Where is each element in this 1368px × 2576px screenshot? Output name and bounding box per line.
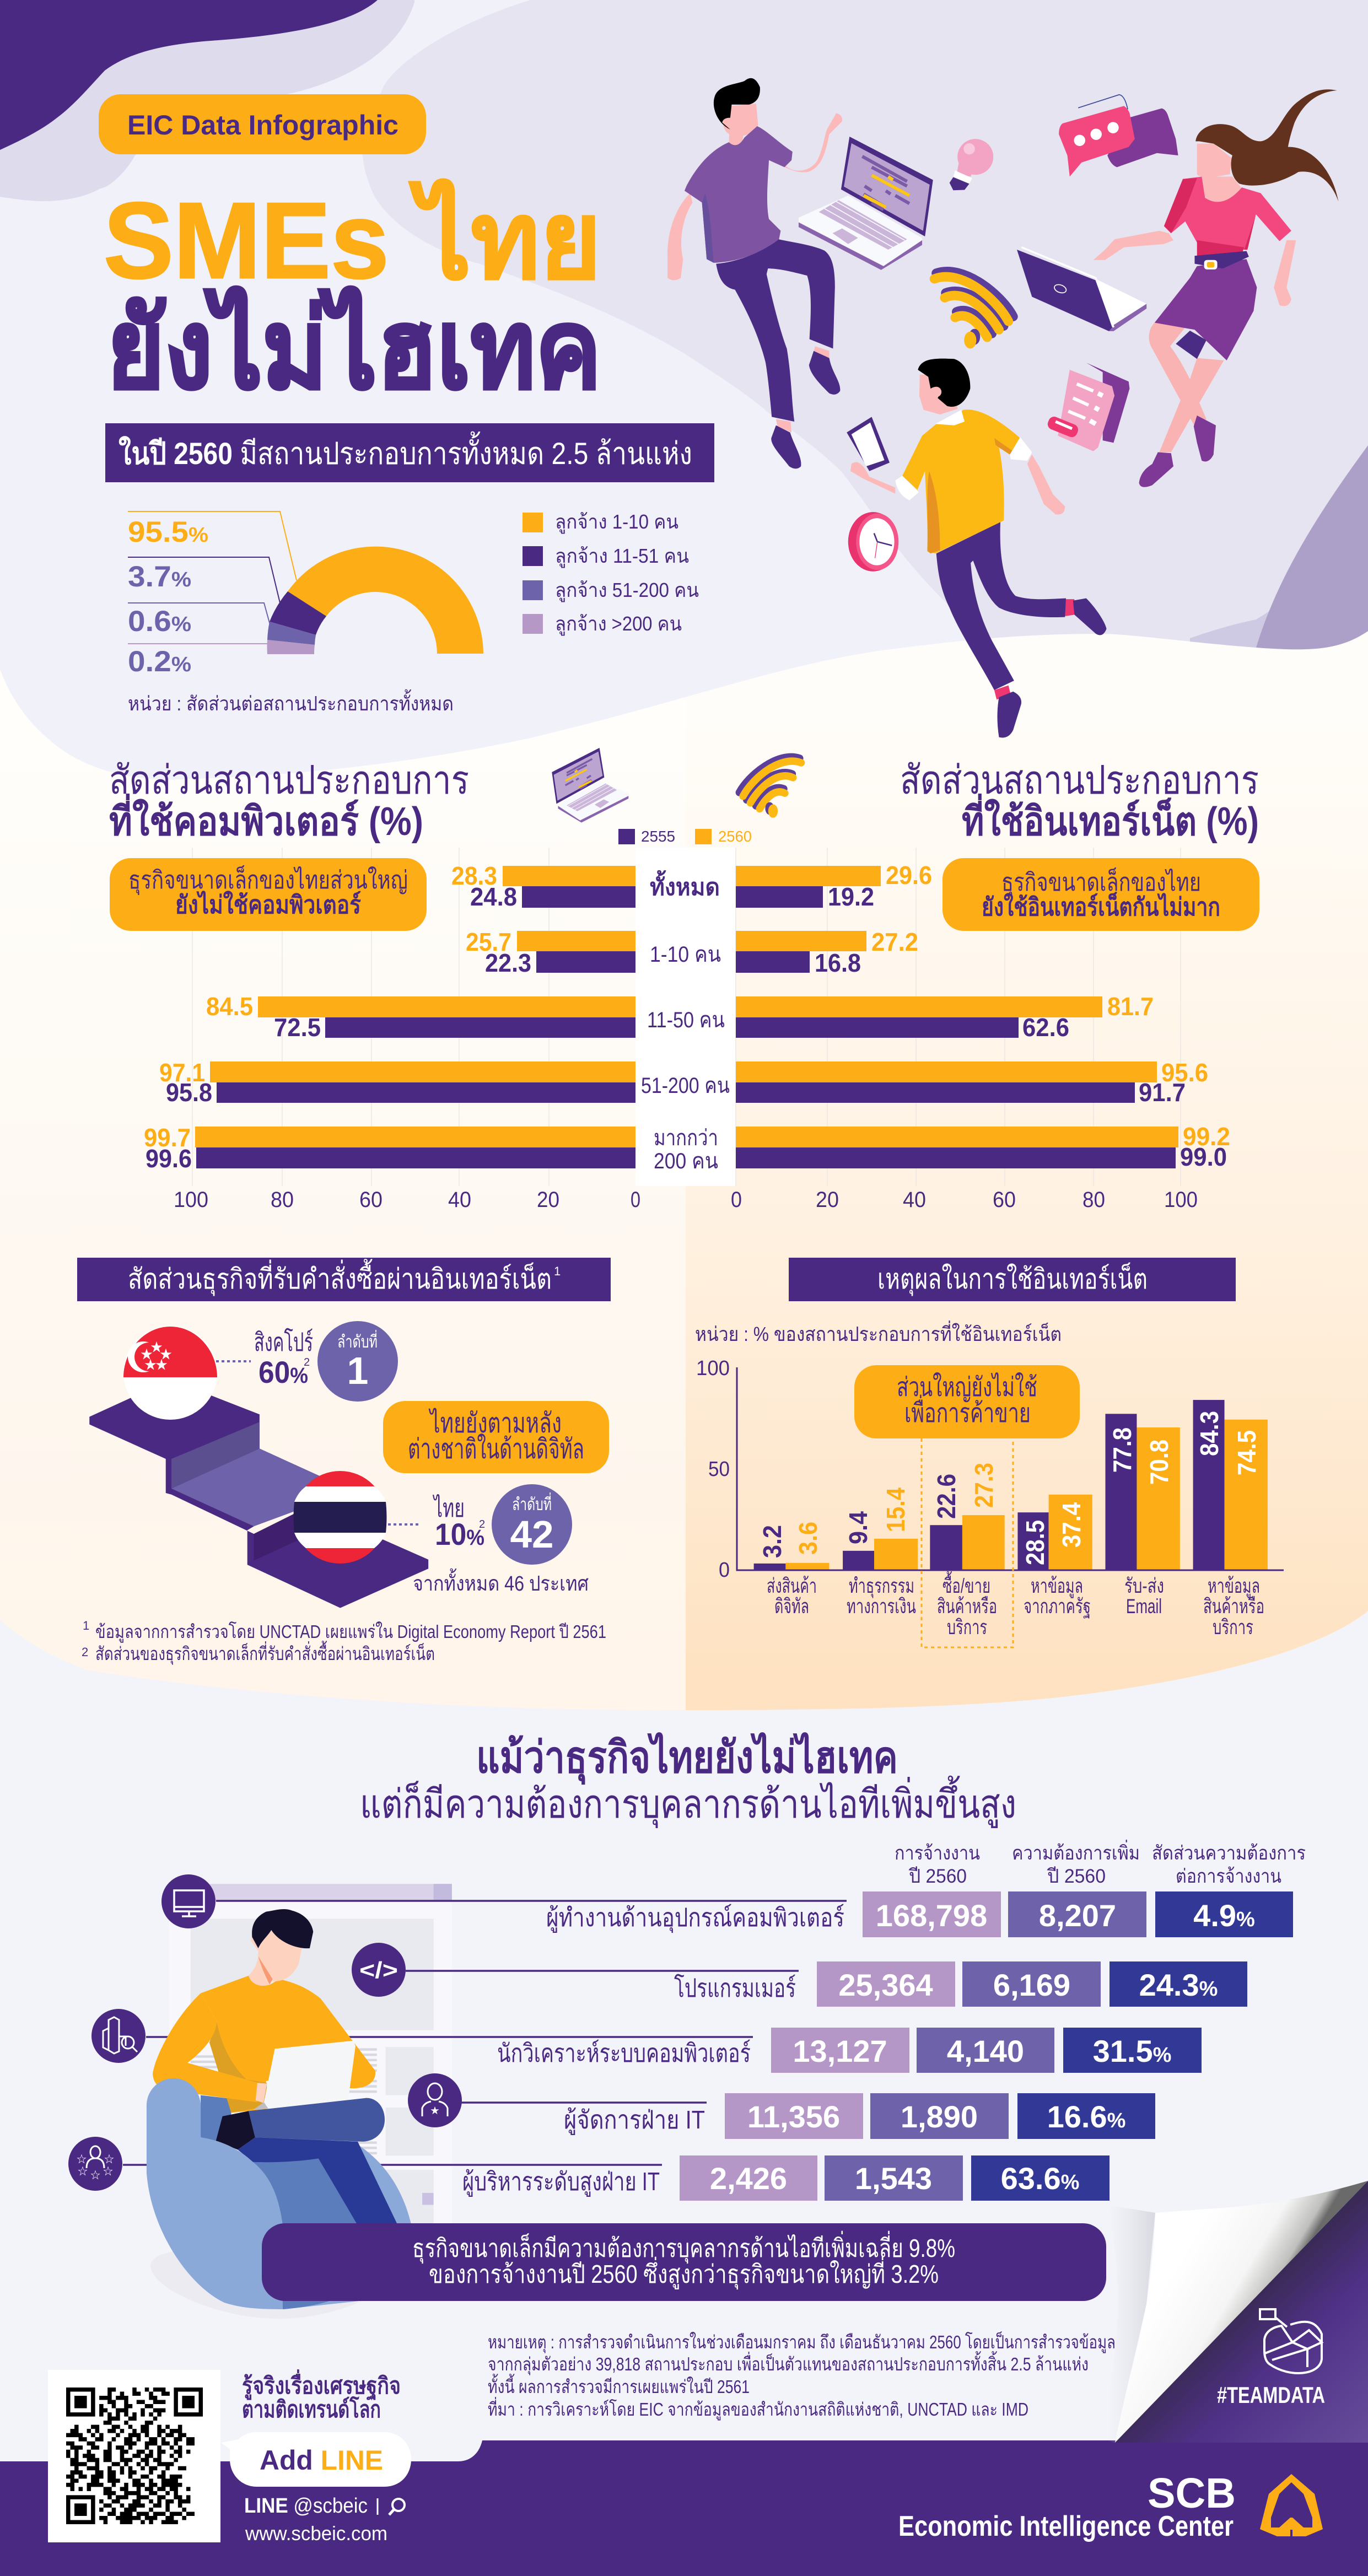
leader: Thailand <box>388 1523 421 1526</box>
contact: LINE id: LINE @scbeic <box>244 2494 368 2518</box>
flag: Singapore: ★ <box>144 1358 157 1372</box>
footnotes: สัดส่วนของธุรกิจขนาดเล็กที่รับคำสั่งซื้อผ่านอินเทอร์เน็ต <box>95 1641 435 1665</box>
donut leader lines <box>128 511 297 644</box>
row: IT executives: 63.6% <box>1001 2161 1079 2196</box>
armchair seat <box>201 2095 380 2309</box>
heading: computer use: ที่ใช้คอมพิวเตอร์ (%) <box>109 793 423 844</box>
row: IT managers: 16.6% <box>1047 2099 1125 2134</box>
category labels: firm size: 51-200 คน <box>641 1074 730 1098</box>
sweater torso and right arm <box>201 1976 375 2112</box>
label: Thailand 10%: 10% <box>435 1517 484 1551</box>
row: IT executives: ผู้บริหารระดับสูงฝ่าย IT <box>462 2167 660 2197</box>
donut legend: ลูกจ้าง 11-51 คน <box>555 545 689 568</box>
donut legend: ลูกจ้าง 51-200 คน <box>555 579 699 602</box>
contact: website: www.scbeic.com <box>245 2522 387 2545</box>
category labels: firm size: 200 คน <box>654 1149 718 1173</box>
bar chart: reasons for internet use: 22.6 <box>932 1474 961 1519</box>
icon: IT manager: ★ <box>430 2106 439 2116</box>
chart: internet use by firm size: 62.6 <box>1022 1013 1069 1042</box>
chart: internet use by firm size: 16.8 <box>815 949 861 977</box>
top corner light blob <box>0 0 414 201</box>
bar chart: reasons for internet use: 37.4 <box>1057 1502 1086 1548</box>
bar chart: reasons for internet use: 50 <box>708 1458 730 1481</box>
row: IT executives <box>462 2155 1110 2201</box>
rank badge: 1: ลำดับที่ <box>337 1330 378 1351</box>
icon: IT executive: ☆ <box>90 2170 100 2181</box>
rank badge: 42: ลำดับที่ <box>512 1492 552 1514</box>
callout: computer use: ธุรกิจขนาดเล็กของไทยส่วนใหญ่ <box>128 865 408 895</box>
callout: demand summary <box>262 2223 1106 2301</box>
icon: IT executive: ☆ <box>78 2166 88 2177</box>
bar chart: reasons for internet use: 9.4 <box>844 1511 872 1544</box>
hero illustration <box>667 78 1338 737</box>
row: programmers: 24.3% <box>1139 1968 1218 2002</box>
open laptop <box>799 137 933 270</box>
heading: internet use: ที่ใช้อินเทอร์เน็ต (%) <box>962 793 1259 844</box>
label: Thailand 10%: 2 <box>479 1518 485 1530</box>
notes and sources: จากกลุ่มตัวอย่าง 39,818 สถานประกอบ เพื่อเป็นตัวแทนของสถานประกอบการทั้งสิ้น 2.5 ล้านแห่ง <box>488 2351 1089 2375</box>
panel header: online orders: 1 <box>554 1264 561 1278</box>
hero background blobs <box>362 0 1368 696</box>
running woman <box>1094 89 1338 487</box>
callout: Thailand lags: ไทยยังตามหลัง <box>428 1408 562 1438</box>
light bulb <box>950 139 993 190</box>
chart: computer use by firm size: 80 <box>271 1188 294 1212</box>
row: computer technicians <box>546 1891 1293 1937</box>
rank badge: 1 <box>317 1321 398 1402</box>
brand: SCB Economic Intelligence Center <box>898 2470 1236 2542</box>
notebook <box>1046 363 1129 451</box>
column headers: IT table: ปี 2560 <box>1047 1866 1106 1887</box>
footnotes: ข้อมูลจากการสำรวจโดย UNCTAD เผยแพร่ใน Digital Economy Report ปี 2561 <box>95 1621 606 1643</box>
label: Singapore 60%: สิงคโปร์ <box>254 1328 313 1356</box>
bar chart: reasons for internet use: ดิจิทัล <box>774 1595 809 1618</box>
head <box>249 1920 305 1986</box>
chart: internet use by firm size: 20 <box>816 1188 839 1212</box>
donut value labels: 95.5% <box>128 516 208 548</box>
row: system analysts: 31.5% <box>1093 2034 1171 2068</box>
row: IT managers: 1,890 <box>901 2099 978 2134</box>
notes and sources: ที่มา : การวิเคราะห์โดย EIC จากข้อมูลของสำนักงานสถิติแห่งชาติ, UNCTAD และ IMD <box>488 2397 1028 2421</box>
label: Singapore 60%: 2 <box>304 1356 310 1368</box>
label: Thailand 10% <box>432 1494 485 1551</box>
flag: Singapore: ★ <box>160 1348 172 1361</box>
chart: computer use by firm size: 60 <box>359 1188 383 1212</box>
badge: EIC Data Infographic: EIC Data Infographic <box>127 110 398 141</box>
callout: internet use: ยังใช้อินเทอร์เน็ตกันไม่มาก <box>982 892 1220 921</box>
icon: mini laptop <box>552 748 628 822</box>
chart: internet use by firm size: 40 <box>903 1188 926 1212</box>
sweater shade <box>209 2022 267 2112</box>
logo: SCB bodhi leaf <box>1260 2474 1323 2536</box>
row: system analysts: นักวิเคราะห์ระบบคอมพิวเตอร์ <box>497 2039 751 2067</box>
panel header: internet use reasons <box>789 1258 1236 1301</box>
chart: computer use by firm size: 24.8 <box>470 882 517 911</box>
flag: Singapore: ★ <box>155 1358 168 1372</box>
donut legend <box>523 510 699 636</box>
callout: not for commerce: ส่วนใหญ่ยังไม่ใช้ <box>897 1372 1037 1402</box>
QR code <box>48 2370 220 2542</box>
icon: IT executive: ☆ <box>77 2154 87 2165</box>
row: system analysts: 4,140 <box>947 2034 1024 2068</box>
heading: computer use <box>109 758 469 844</box>
row: system analysts: 13,127 <box>793 2034 887 2068</box>
rank badge: 42: 42 <box>510 1513 553 1556</box>
wifi symbol <box>934 272 1013 348</box>
icon: programmer <box>352 1943 406 1997</box>
label: Singapore 60%: 60% <box>258 1355 308 1389</box>
bar chart: reasons for internet use: 84.3 <box>1195 1411 1224 1456</box>
brand: SCB Economic Intelligence Center: SCB <box>1148 2470 1236 2517</box>
chart: internet use by firm size: 95.6 <box>1161 1058 1208 1087</box>
flag: Singapore: ★ <box>141 1348 153 1361</box>
callout: computer use <box>110 858 427 931</box>
bar chart: reasons for internet use: ส่งสินค้า <box>767 1575 817 1597</box>
section heading: IT workforce: แต่ก็มีความต้องการบุคลากรด้านไอทีเพิ่มขึ้นสูง <box>360 1775 1016 1828</box>
icon: computer technician <box>161 1874 216 1928</box>
bubble: Add LINE: Add LINE <box>260 2445 383 2476</box>
callout: Thailand lags: ต่างชาติในด้านดิจิทัล <box>408 1433 584 1464</box>
bar chart: reasons for internet use: บริการ <box>947 1616 987 1639</box>
bar chart: reasons for internet use: 0 <box>719 1559 730 1582</box>
connector lines <box>123 1901 847 2165</box>
chart: internet use by firm size: 29.6 <box>886 861 932 890</box>
chart: computer use by firm size: 28.3 <box>451 861 497 890</box>
chart: internet use by firm size: 100 <box>1164 1188 1198 1212</box>
section heading: IT workforce <box>360 1732 1016 1828</box>
row: IT managers: 11,356 <box>747 2099 840 2134</box>
row: IT managers: ผู้จัดการฝ่าย IT <box>564 2105 705 2135</box>
unit note: reasons: หน่วย : % ของสถานประกอบการที่ใช้อินเทอร์เน็ต <box>695 1321 1062 1345</box>
icon: IT executive <box>68 2137 122 2191</box>
wall clock <box>848 512 898 572</box>
panel header: online orders: สัดส่วนธุรกิจที่รับคำสั่งซื้อผ่านอินเทอร์เน็ต <box>128 1259 552 1296</box>
donut value labels <box>128 516 208 678</box>
callout: demand summary: ของการจ้างงานปี 2560 ซึ่งสูงกว่าธุรกิจขนาดใหญ่ที่ 3.2% <box>429 2256 939 2290</box>
label: Thailand 10%: ไทย <box>432 1494 465 1522</box>
badge: EIC Data Infographic <box>99 94 426 154</box>
chart: internet use by firm size: 99.2 <box>1183 1122 1230 1151</box>
footnotes <box>82 1619 606 1665</box>
man with purple shirt <box>667 78 842 468</box>
panel header: internet use reasons: เหตุผลในการใช้อินเทอร์เน็ต <box>877 1263 1148 1296</box>
dotted highlight box <box>922 1438 1013 1647</box>
page curl <box>1097 2181 1368 2443</box>
icon: team data <box>1260 2309 1322 2373</box>
column headers: IT table: ปี 2560 <box>908 1866 967 1887</box>
bar chart: reasons for internet use: 27.3 <box>970 1463 998 1508</box>
text: follow the economy <box>242 2369 401 2422</box>
laptop <box>264 2041 356 2109</box>
text: follow the economy: รู้จริงเรื่องเศรษฐกิจ <box>242 2369 401 2401</box>
top corner dark blob <box>0 0 378 150</box>
heading: computer use: สัดส่วนสถานประกอบการ <box>109 758 469 802</box>
row: IT executives: 1,543 <box>855 2161 932 2196</box>
hashtag: TEAMDATA: #TEAMDATA <box>1217 2382 1325 2408</box>
chart: computer use by firm size <box>144 848 640 1212</box>
category labels: firm size: 11-50 คน <box>647 1008 725 1032</box>
person on armchair <box>147 1909 436 2319</box>
flag: Thailand <box>293 1471 387 1564</box>
legend: years: 2560 <box>718 828 752 845</box>
donut value labels: 0.2% <box>128 645 191 678</box>
title: ยังไม่ไฮเทค <box>107 286 601 411</box>
cream middle background <box>0 606 1368 1714</box>
bar chart: reasons for internet use: ทางการเงิน <box>847 1595 916 1618</box>
column headers: IT table <box>895 1840 1306 1887</box>
browser window backdrop <box>169 1884 452 2225</box>
chart: computer use by firm size: 20 <box>537 1188 559 1212</box>
rank badge: 42 <box>492 1484 572 1565</box>
bar chart: reasons for internet use: 3.6 <box>794 1522 822 1555</box>
section heading: IT workforce: แม้ว่าธุรกิจไทยยังไม่ไฮเทค <box>476 1732 898 1785</box>
bar chart: reasons for internet use: ทำธุรกรรม <box>849 1575 914 1598</box>
chart: computer use by firm size: 22.3 <box>485 949 531 977</box>
chart: internet use by firm size: 80 <box>1082 1188 1105 1212</box>
footnotes: 2 <box>82 1645 88 1659</box>
closed laptop <box>1017 247 1146 331</box>
chart: computer use by firm size: 99.7 <box>144 1123 191 1152</box>
chart: computer use by firm size: 72.5 <box>274 1013 321 1042</box>
icon: programmer: </> <box>359 1957 398 1983</box>
chart: computer use by firm size: 0 <box>631 1188 640 1212</box>
bar chart: reasons for internet use: 3.2 <box>758 1525 787 1558</box>
column headers: IT table: สัดส่วนความต้องการ <box>1152 1842 1306 1864</box>
icon: IT executive: ☆ <box>103 2166 113 2177</box>
bar chart: reasons for internet use: 74.5 <box>1232 1430 1261 1475</box>
row: computer technicians: 8,207 <box>1039 1898 1116 1933</box>
top hero background <box>0 0 1368 780</box>
bar chart: reasons for internet use <box>696 1357 1284 1639</box>
chart: internet use by firm size: 19.2 <box>828 882 874 911</box>
bar chart: reasons for internet use: หาข้อมูล <box>1208 1575 1260 1598</box>
chart: computer use by firm size: 100 <box>174 1188 208 1212</box>
note: out of 46 countries: จากทั้งหมด 46 ประเทศ <box>413 1568 589 1596</box>
bar chart: reasons for internet use: 15.4 <box>881 1488 910 1532</box>
callout: internet use: ธุรกิจขนาดเล็กของไทย <box>1001 867 1201 897</box>
footer band <box>0 2440 1368 2576</box>
chair shadow <box>150 2229 436 2319</box>
bar chart: reasons for internet use: 100 <box>696 1357 730 1380</box>
chart: computer use by firm size: 84.5 <box>206 992 253 1021</box>
category labels: firm size: ทั้งหมด <box>650 870 720 900</box>
callout: Thailand lags <box>383 1401 609 1473</box>
legend: years: 2555 <box>641 828 675 845</box>
icon: IT executive: ☆ <box>104 2154 114 2165</box>
donut legend: ลูกจ้าง >200 คน <box>555 612 682 636</box>
leader: Singapore <box>216 1360 251 1362</box>
bar chart: reasons for internet use: 70.8 <box>1145 1440 1173 1485</box>
rank badge: 1: 1 <box>347 1349 368 1392</box>
bar chart: reasons for internet use: 28.5 <box>1021 1520 1049 1565</box>
chart: internet use by firm size: 81.7 <box>1107 992 1154 1021</box>
text: follow the economy: ตามติดเทรนด์โลก <box>242 2396 381 2422</box>
title <box>104 179 601 411</box>
notes and sources <box>488 2331 1116 2421</box>
icon: IT manager <box>408 2073 462 2127</box>
chart: computer use by firm size: 99.6 <box>146 1144 192 1173</box>
bar chart: reasons for internet use: ซื้อ/ขาย <box>942 1571 990 1597</box>
chart: computer use by firm size: 95.8 <box>166 1078 212 1107</box>
banner: total establishments <box>105 423 714 482</box>
bar chart: reasons for internet use: รับ-ส่ง <box>1124 1575 1164 1597</box>
callout: not for commerce <box>854 1365 1080 1438</box>
column headers: IT table: ต่อการจ้างงาน <box>1176 1866 1281 1887</box>
row: IT executives: 2,426 <box>710 2161 787 2196</box>
donut unit note: หน่วย : สัดส่วนต่อสถานประกอบการทั้งหมด <box>128 689 454 715</box>
bubble: Add LINE <box>221 2432 411 2487</box>
category labels: firm size: 1-10 คน <box>650 942 721 967</box>
chart: internet use by firm size: 0 <box>731 1188 742 1212</box>
icon: system analyst <box>91 2009 146 2063</box>
notes and sources: หมายเหตุ : การสำรวจดำเนินการในช่วงเดือนมกราคม ถึง เดือนธันวาคม 2560 โดยเป็นการสำรวจข้อมูล <box>488 2331 1116 2353</box>
notes and sources: ทั้งนี้ ผลการสำรวจมีการเผยแพร่ในปี 2561 <box>488 2374 750 2397</box>
donut value labels: 0.6% <box>128 605 191 638</box>
armchair back <box>218 2130 413 2309</box>
donut legend: ลูกจ้าง 1-10 คน <box>555 510 678 534</box>
label: Singapore 60% <box>254 1328 313 1389</box>
callout: internet use <box>942 858 1259 931</box>
chart: internet use by firm size: 91.7 <box>1139 1078 1186 1107</box>
chart: internet use by firm size: 99.0 <box>1180 1143 1227 1171</box>
panel header: online orders <box>77 1258 611 1301</box>
chart: internet use by firm size: 27.2 <box>871 928 918 956</box>
chart: computer use by firm size: 40 <box>448 1188 471 1212</box>
chart: internet use by firm size <box>731 848 1230 1212</box>
chart: computer use by firm size: 25.7 <box>466 928 511 956</box>
bar chart: reasons for internet use: สินค้าหรือ <box>937 1595 997 1618</box>
row: system analysts <box>497 2028 1202 2073</box>
bar chart: reasons for internet use: Email <box>1126 1595 1162 1618</box>
chart: computer use by firm size: 97.1 <box>159 1058 205 1087</box>
banner: total establishments: ในปี 2560 มีสถานประกอบการทั้งหมด 2.5 ล้านแห่ง <box>119 432 692 471</box>
heading: internet use <box>900 758 1259 844</box>
heading: internet use: สัดส่วนสถานประกอบการ <box>900 758 1259 802</box>
bar chart: reasons for internet use: 77.8 <box>1108 1427 1137 1473</box>
legs <box>238 2137 398 2225</box>
row: computer technicians: ผู้ทำงานด้านอุปกรณ์คอมพิวเตอร์ <box>546 1903 844 1933</box>
column headers: IT table: การจ้างงาน <box>895 1842 980 1864</box>
row: computer technicians: 4.9% <box>1193 1898 1255 1933</box>
donut value labels: 3.7% <box>128 561 191 593</box>
row: programmers: 6,169 <box>993 1968 1070 2002</box>
legend: years <box>618 828 752 845</box>
bar chart: reasons for internet use: สินค้าหรือ <box>1203 1595 1264 1618</box>
icon: mini wifi <box>739 757 801 818</box>
sweater left arm <box>153 1993 258 2102</box>
running man with yellow shirt <box>847 359 1107 737</box>
callout: not for commerce: เพื่อการค้าขาย <box>904 1394 1031 1428</box>
callout: demand summary: ธุรกิจขนาดเล็กมีความต้องการบุคลากรด้านไอทีเพิ่มเฉลี่ย 9.8% <box>412 2230 955 2264</box>
flag: Singapore: ★ <box>150 1340 163 1354</box>
row: programmers: 25,364 <box>838 1968 933 2002</box>
category labels: firm size: มากกว่า <box>654 1126 718 1150</box>
title: SMEs ไทย <box>104 179 601 301</box>
chat bubbles <box>1059 95 1178 177</box>
row: IT managers <box>564 2093 1155 2139</box>
category labels: firm size <box>635 848 736 1186</box>
bar chart: reasons for internet use: บริการ <box>1213 1616 1253 1639</box>
donut chart: establishment share <box>267 547 483 654</box>
chart: internet use by firm size: 60 <box>993 1188 1016 1212</box>
row: programmers: โปรแกรมเมอร์ <box>674 1974 796 2002</box>
callout: computer use: ยังไม่ใช้คอมพิวเตอร์ <box>175 890 361 919</box>
front chair arm <box>147 2078 283 2309</box>
footnotes: 1 <box>83 1619 89 1632</box>
brand: SCB Economic Intelligence Center: Economic Intelligence Center <box>898 2510 1234 2542</box>
row: programmers <box>674 1961 1247 2007</box>
bar chart: reasons for internet use: จากภาครัฐ <box>1024 1595 1091 1619</box>
bar chart: reasons for internet use: หาข้อมูล <box>1031 1575 1083 1598</box>
row: computer technicians: 168,798 <box>876 1898 987 1933</box>
isometric steps graphic <box>89 1379 428 1608</box>
column headers: IT table: ความต้องการเพิ่ม <box>1012 1840 1140 1864</box>
flag: Singapore <box>123 1326 217 1420</box>
